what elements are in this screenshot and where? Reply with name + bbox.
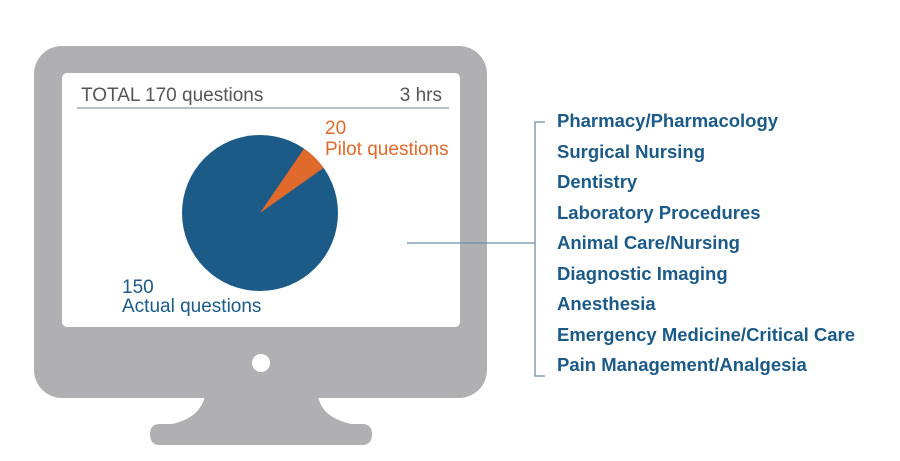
- topic list: Pharmacy/Pharmacology: [557, 110, 779, 131]
- header: total questions: TOTAL 170 questions: [81, 85, 263, 106]
- label: actual questions: 150: [122, 277, 154, 298]
- topic list: Animal Care/Nursing: [557, 232, 740, 253]
- header: total questions: [77, 85, 449, 108]
- topic list: Anesthesia: [557, 293, 656, 314]
- topic list: Emergency Medicine/Critical Care: [557, 324, 855, 345]
- label: pilot questions: 20: [325, 118, 346, 139]
- label: actual questions: Actual questions: [122, 296, 261, 317]
- label: pilot questions: [325, 118, 449, 160]
- label: pilot questions: Pilot questions: [325, 139, 449, 160]
- monitor body: [34, 46, 487, 398]
- topic list: Dentistry: [557, 171, 638, 192]
- topic list: Diagnostic Imaging: [557, 263, 728, 284]
- icon: power button: [252, 354, 270, 372]
- pie chart: [182, 135, 338, 291]
- topic list: Laboratory Procedures: [557, 202, 761, 223]
- connector line and bracket: [407, 122, 545, 376]
- topic list: [557, 110, 855, 375]
- monitor stand: [150, 396, 372, 445]
- header: total questions: 3 hrs: [400, 85, 442, 106]
- topic list: Surgical Nursing: [557, 141, 705, 162]
- monitor: [34, 46, 487, 445]
- topic list: Pain Management/Analgesia: [557, 354, 808, 375]
- screen: [62, 73, 460, 327]
- label: actual questions: [122, 277, 261, 317]
